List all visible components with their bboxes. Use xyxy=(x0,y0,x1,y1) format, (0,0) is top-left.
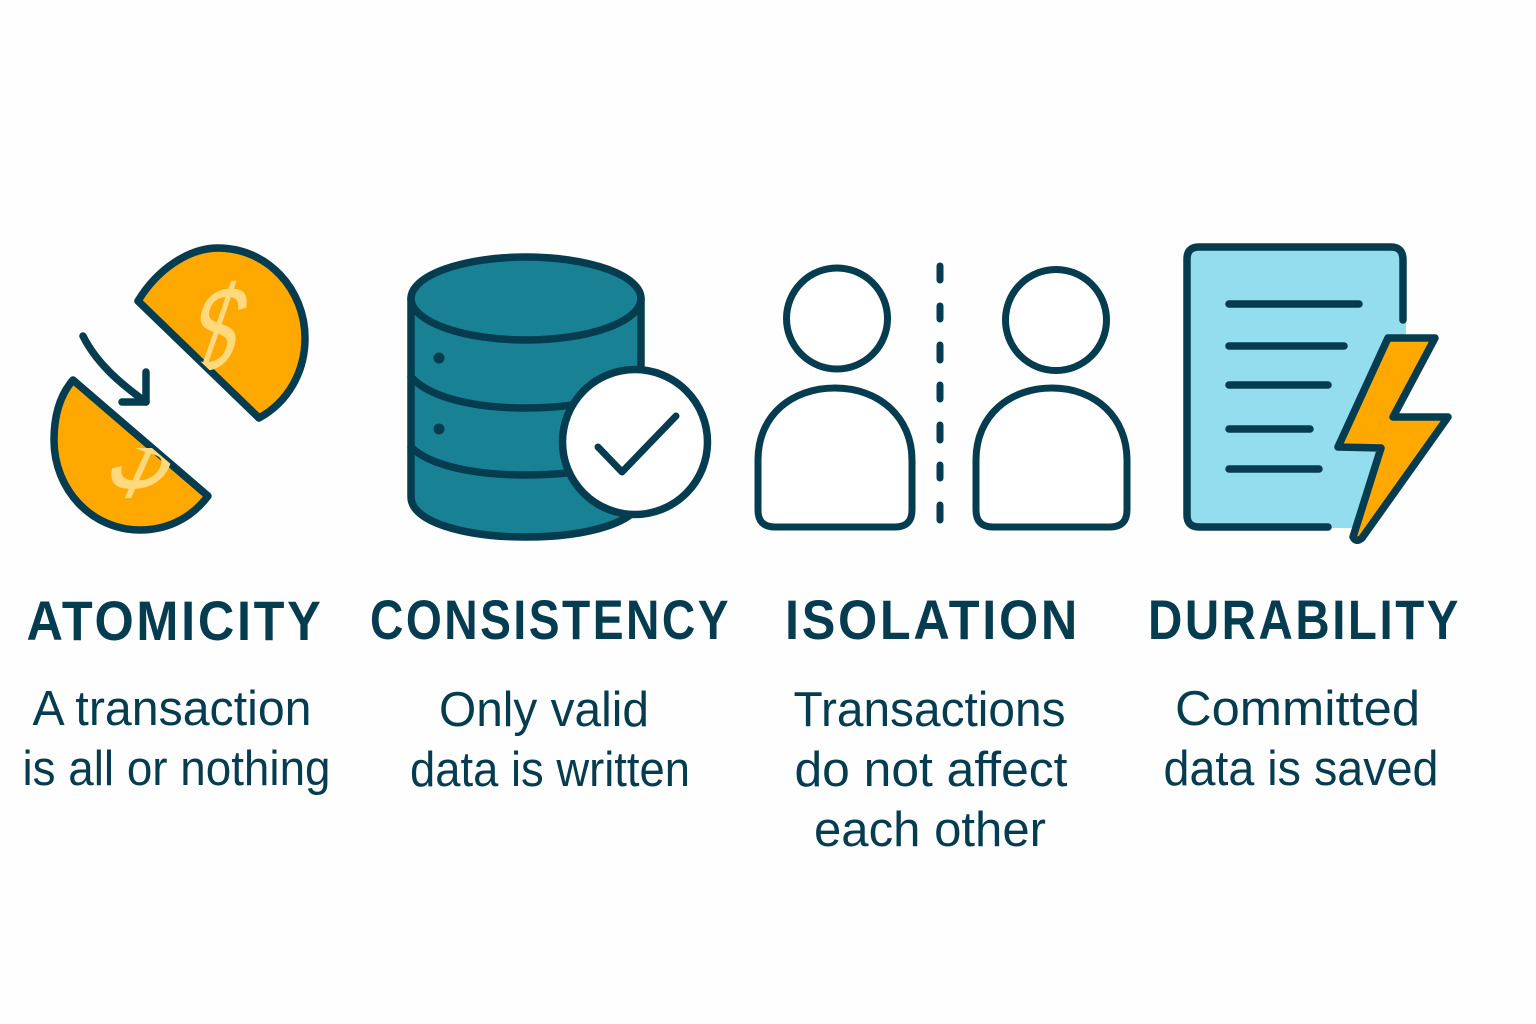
heading: atomicity: ATOMICITY xyxy=(26,589,324,652)
icon: atomicity split coin: $ xyxy=(168,261,265,398)
text: isolation description: Transactions xyxy=(794,683,1066,737)
heading: durability: DURABILITY xyxy=(1148,588,1461,651)
text: durability description: Committed xyxy=(1175,682,1420,736)
icon: atomicity split coin: $ xyxy=(90,384,208,516)
text: atomicity description xyxy=(22,682,330,796)
icon: atomicity split coin xyxy=(54,248,305,530)
icon: consistency database with check xyxy=(411,257,708,537)
icon: durability document with lightning bolt xyxy=(1187,247,1448,540)
icon: isolation two separated people xyxy=(758,266,1127,527)
text: isolation description: each other xyxy=(814,803,1046,857)
text: durability description: data is saved xyxy=(1164,742,1438,796)
text: atomicity description: is all or nothing xyxy=(22,742,330,796)
heading: isolation: ISOLATION xyxy=(785,588,1080,651)
text: consistency description: data is written xyxy=(410,743,690,797)
text: isolation description: do not affect xyxy=(794,743,1068,797)
text: isolation description xyxy=(794,683,1068,857)
text: durability description xyxy=(1164,682,1438,796)
heading: consistency: CONSISTENCY xyxy=(370,588,731,651)
text: atomicity description: A transaction xyxy=(32,682,312,736)
text: consistency description: Only valid xyxy=(439,683,649,737)
text: consistency description xyxy=(410,683,690,797)
